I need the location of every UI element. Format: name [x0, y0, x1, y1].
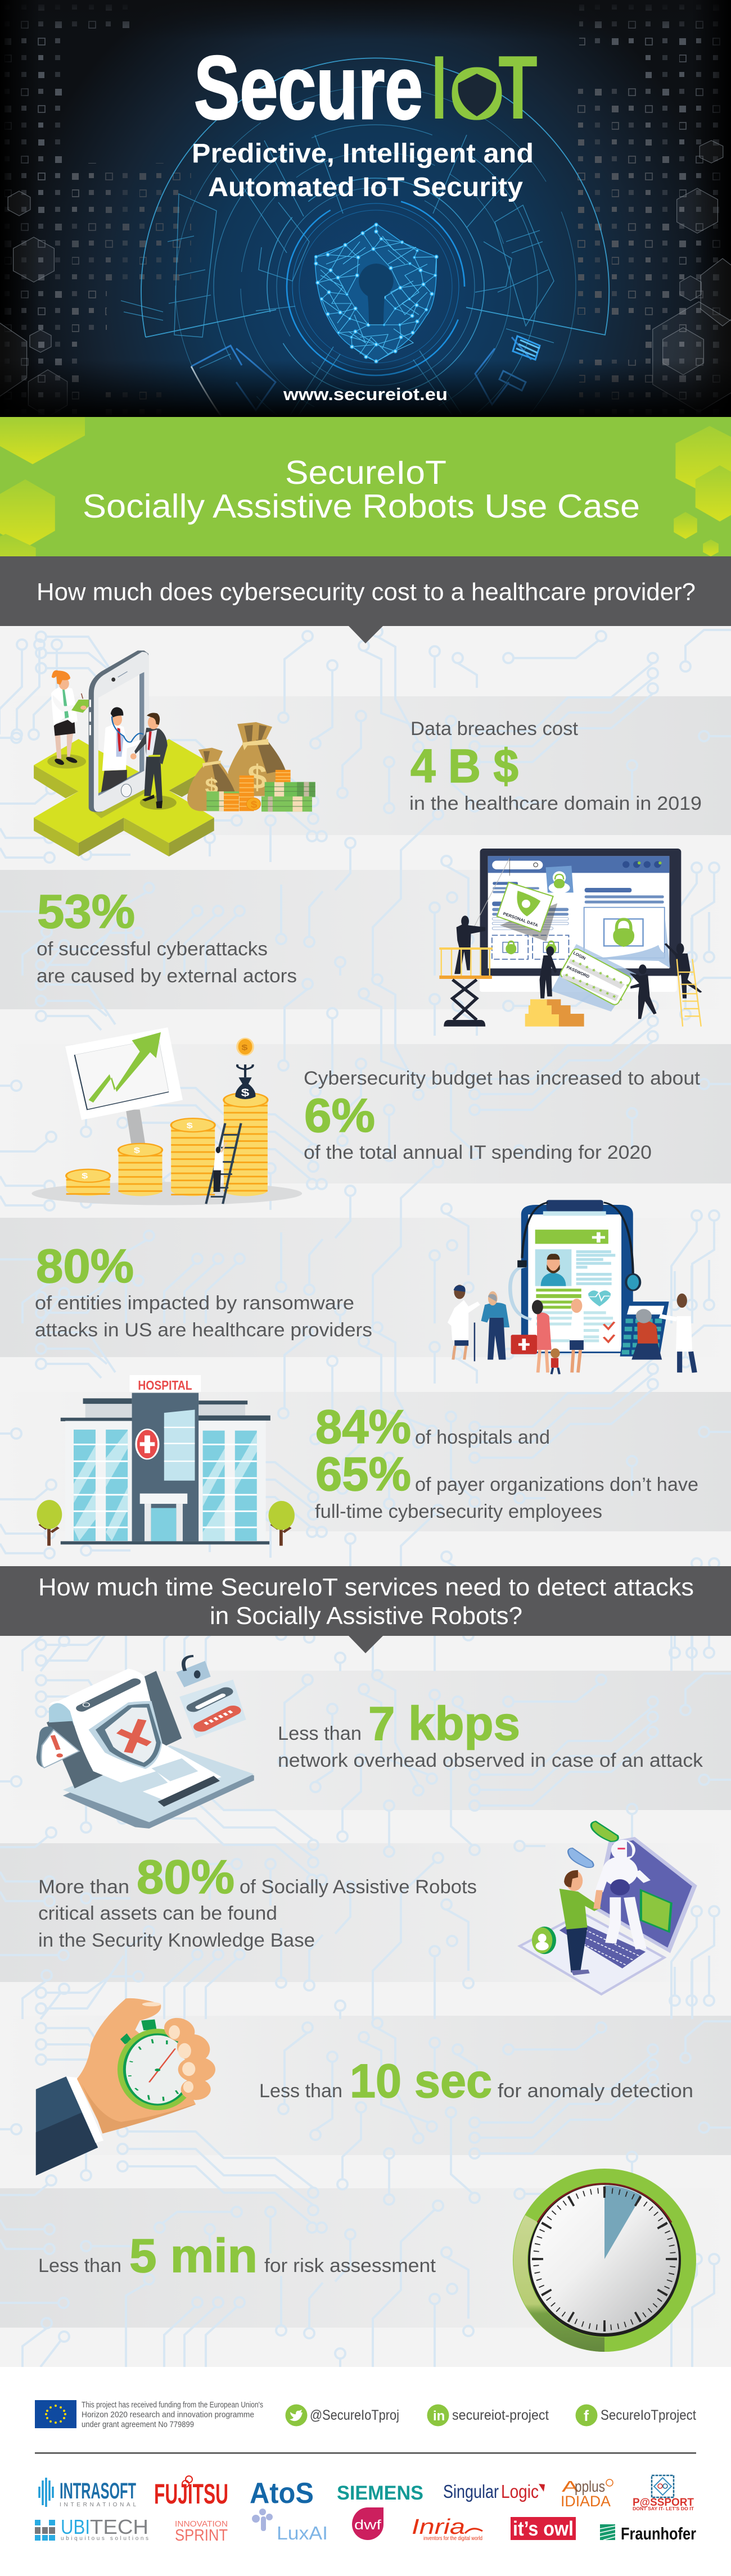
logo: Fraunhofer: [600, 2524, 696, 2543]
text block: 53 percent: [37, 885, 297, 987]
logo: Passport: DONT SAY IT- LET'S DO IT: [633, 2506, 694, 2511]
text block: 80 percent ransomware: 80%: [36, 1240, 134, 1292]
text block: 7 kbps: 7 kbps: [368, 1697, 520, 1750]
chat bubbles: [532, 1821, 618, 1954]
text block: 80 percent ransomware: attacks in US are healthcare providers: [35, 1319, 372, 1341]
laptop base: [520, 1839, 694, 1994]
panel: hero header: [0, 0, 731, 487]
linkedin: in: [433, 2409, 445, 2424]
text block: 5 min: 5 min: [129, 2229, 258, 2282]
text block: 80 percent critical assets: More than: [38, 1876, 129, 1898]
logo: Atos: AtoS: [250, 2477, 314, 2510]
text block: 5 min: [38, 2229, 436, 2282]
text block: 80 percent ransomware: [35, 1240, 372, 1341]
document page: [49, 1668, 222, 1804]
text block: 53 percent: are caused by external actors: [37, 965, 297, 987]
logo: Inria: inventors for the digital world: [423, 2536, 482, 2542]
illustration: coin stacks and growth chart: [31, 1027, 302, 1205]
logo: Applus IDIADA: IDIADA: [561, 2493, 611, 2510]
coin stacks: $: [134, 1146, 141, 1155]
footer white area: [0, 2367, 731, 2576]
coin stacks: $: [187, 1121, 193, 1130]
logo: Intrasoft: INTERNATIONAL: [60, 2502, 136, 2508]
text block: hospitals and payer organizations: of payer organizations don’t have: [415, 1474, 698, 1495]
text block: hospitals and payer organizations: of hospitals and: [415, 1427, 550, 1448]
text block: budget: of the total annual IT spending for 2020: [304, 1142, 652, 1163]
text block: budget: 6%: [304, 1089, 375, 1142]
text block: 7 kbps: [278, 1697, 703, 1771]
scissor lift: [444, 979, 485, 1027]
website url: www.secureiot.eu: [283, 384, 448, 404]
circuit background pattern: [0, 564, 731, 2367]
text block: 53 percent: of successful cyberattacks: [37, 938, 268, 960]
facebook: f: [584, 2407, 589, 2424]
tagline: Predictive, Intelligent and: [192, 139, 534, 169]
heading: detection time: How much time SecureIoT services need to detect attacks: [38, 1573, 694, 1601]
main light background: [0, 626, 731, 2367]
calculator: [620, 1301, 669, 1357]
panel: partner logos: [35, 2475, 696, 2545]
personal data card: [473, 858, 557, 941]
heading: cybersecurity cost: How much does cybersecurity cost to a healthcare provider?: [37, 578, 696, 606]
tagline: Automated IoT Security: [208, 173, 523, 202]
logo: Applus IDIADA: A: [562, 2478, 579, 2495]
facebook: [576, 2404, 696, 2427]
logo: Fujitsu: [154, 2476, 228, 2510]
logo: SecureIoT: o: [448, 32, 506, 140]
robot: [599, 1840, 647, 1949]
warning triangle: [37, 1726, 79, 1768]
panel: EU funding: This project has received funding from the European Union's: [82, 2400, 263, 2410]
logo: Passport: [633, 2475, 694, 2511]
text block: data breaches: in the healthcare domain in 2019: [409, 793, 702, 814]
logo: Intrasoft: [39, 2478, 136, 2508]
linkedin: [427, 2404, 549, 2427]
logo: Innovation Sprint: INNOVATION: [175, 2519, 228, 2529]
icon: network shield with keyhole: [314, 223, 438, 363]
logo: it's owl: it’s owl: [513, 2517, 574, 2540]
hand: [77, 1998, 196, 2134]
illustration: hackers attacking a web page: [439, 849, 702, 1027]
cash and coins: $: [251, 799, 258, 810]
logo: Ubitech: UBI: [61, 2515, 90, 2538]
green card: [641, 1890, 671, 1932]
text block: 10 sec: [259, 2055, 693, 2107]
text block: 5 min: Less than: [38, 2255, 121, 2276]
money bags: $: [247, 758, 267, 796]
smartphone: [89, 651, 148, 818]
text block: data breaches: 4 B $: [410, 740, 518, 792]
fingers: [161, 2017, 215, 2100]
text block: 80 percent critical assets: critical assets can be found: [38, 1903, 277, 1924]
logo: Intrasoft: INTRASOFT: [60, 2479, 136, 2504]
text block: 10 sec: for anomaly detection: [498, 2080, 693, 2102]
text block: 80 percent critical assets: 80%: [137, 1851, 234, 1903]
money bag with plant: $: [241, 1087, 250, 1099]
hexagon outlines: [0, 140, 731, 417]
text block: 80 percent critical assets: in the Security Knowledge Base: [38, 1930, 315, 1951]
money bags: [187, 722, 286, 811]
trees: [37, 1500, 295, 1546]
twitter: [286, 2404, 399, 2427]
logo: dwf: [352, 2507, 383, 2540]
illustration: hand holding stopwatch: [36, 1998, 215, 2175]
logo: Siemens: SIEMENS: [337, 2482, 423, 2504]
text block: hospitals and payer organizations: 84%: [315, 1400, 411, 1453]
cash and coins: [206, 770, 315, 811]
hackers and ladders: [454, 915, 702, 1019]
group of patients and doctors: [448, 1285, 694, 1374]
logo: SecureIoT: T: [498, 37, 538, 138]
title text: Socially Assistive Robots Use Case: [83, 488, 640, 525]
twitter: @SecureIoTproj: [310, 2407, 399, 2423]
logo: Ubitech: [35, 2515, 148, 2542]
facebook: SecureIoTproject: [601, 2407, 696, 2423]
medical cross platform: [34, 739, 214, 856]
doctor: [101, 707, 143, 792]
stopwatch: [118, 2020, 197, 2110]
text block: budget: [304, 1068, 701, 1163]
panel: EU funding: Horizon 2020 research and innovation programme: [82, 2410, 254, 2420]
icon: EU flag: [35, 2400, 76, 2428]
hospital sign: HOSPITAL: [138, 1378, 192, 1393]
illustration: clock with five minute wedge: [513, 2169, 696, 2352]
logo: Passport: P@SSPORT: [633, 2497, 694, 2509]
text block: hospitals and payer organizations: full-time cybersecurity employees: [315, 1501, 602, 1522]
logo: LuxAI: LuxAI: [277, 2523, 328, 2543]
login card: [551, 944, 637, 1012]
money bags: $: [205, 774, 218, 798]
title text: SecureIoT: [285, 454, 446, 491]
logo: Ubitech: ubiquitous solutions: [61, 2536, 148, 2542]
man: [559, 1870, 601, 1975]
side wings: [61, 1398, 270, 1541]
illustration: doctors on phone with money: [34, 651, 315, 856]
text block: 53 percent: 53%: [37, 885, 135, 938]
hospital sign: [129, 1375, 201, 1393]
coin stacks: $: [82, 1172, 88, 1180]
illustration: robot and man with laptop: [520, 1821, 694, 1994]
padlock: [176, 1656, 211, 1687]
text block: 80 percent critical assets: of Socially Assistive Robots: [240, 1876, 477, 1898]
login card: LOGIN: [572, 950, 586, 961]
heading: detection time: in Socially Assistive Robots?: [210, 1602, 522, 1630]
logo: Fraunhofer: Fraunhofer: [621, 2524, 696, 2543]
illustration: medical clipboard and people: [448, 1200, 694, 1374]
clipboard: [510, 1200, 640, 1353]
password card: [179, 1680, 246, 1738]
laptop: [47, 1671, 254, 1829]
login card: * * * * * * * * *: [570, 958, 631, 991]
text block: 7 kbps: network overhead observed in case of an attack: [278, 1750, 703, 1771]
businessman: [130, 713, 177, 810]
text block: 7 kbps: Less than: [278, 1723, 362, 1744]
green padlocks: [506, 919, 634, 954]
login card: * * * * * * * * *: [563, 972, 625, 1005]
money bag with plant: [235, 1038, 255, 1099]
panel: social links: [286, 2404, 696, 2427]
nurse: [47, 670, 89, 769]
text block: 80 percent ransomware: of entities impacted by ransomware: [35, 1292, 354, 1314]
gold stairs: [525, 999, 584, 1027]
linkedin: secureiot-project: [452, 2407, 549, 2423]
logo: SingularLogic: [443, 2481, 545, 2502]
heading: cybersecurity cost: [0, 556, 731, 643]
text block: data breaches: Data breaches cost: [410, 718, 579, 740]
logo: SecureIoT: Secure: [194, 37, 423, 138]
shield with red cross: [89, 1701, 162, 1769]
panel: EU funding: under grant agreement No 779899: [82, 2420, 194, 2429]
monitor: [480, 849, 681, 992]
logo: Ubitech: TECH: [90, 2515, 148, 2538]
chart board: [65, 1027, 183, 1145]
logo: Applus IDIADA: pplus: [575, 2478, 605, 2495]
money bag with plant: $: [241, 1043, 248, 1052]
logo: Applus IDIADA: [561, 2478, 613, 2510]
circular tech rings: [121, 58, 609, 487]
logo: SingularLogic: Singular: [443, 2481, 499, 2502]
logo: SingularLogic: Logic: [501, 2481, 539, 2502]
illustration: laptop with breached shield: [37, 1656, 254, 1829]
text block: 5 min: for risk assessment: [264, 2255, 436, 2276]
title text: [83, 454, 640, 525]
logo: Innovation Sprint: SPRINT: [175, 2527, 228, 2545]
central tower: [132, 1393, 198, 1541]
panel: EU funding: [35, 2400, 263, 2429]
text block: hospitals and payer organizations: 65%: [315, 1448, 411, 1500]
logo: SecureIoT: I: [431, 37, 447, 138]
ladder and climber: [206, 1123, 241, 1204]
text block: hospitals and payer organizations: [315, 1400, 698, 1522]
login card: PASSWORD: [566, 964, 590, 979]
personal data card: PERSONAL DATA: [502, 911, 539, 928]
text block: budget: Cybersecurity budget has increased to about: [304, 1068, 701, 1089]
logo: Inria: [412, 2515, 482, 2542]
text block: 10 sec: 10 sec: [350, 2055, 492, 2107]
illustration: hospital building: [37, 1375, 295, 1546]
logo: Innovation Sprint: [175, 2519, 228, 2545]
text block: 80 percent critical assets: [38, 1851, 477, 1951]
text block: data breaches: [409, 718, 702, 814]
sleeve: [36, 2076, 103, 2175]
logo: Fujitsu: FUJITSU: [154, 2478, 228, 2510]
logo: Inria: Inria: [412, 2515, 465, 2539]
tagline: [192, 139, 534, 202]
section bands: [0, 696, 731, 2328]
panel: green title band: [0, 417, 731, 590]
heading: detection time: [0, 1566, 731, 1653]
logo: dwf: dwf: [354, 2518, 381, 2533]
logo: LuxAI: [252, 2509, 328, 2543]
text block: 10 sec: Less than: [259, 2080, 342, 2102]
coin stacks: [66, 1093, 268, 1196]
